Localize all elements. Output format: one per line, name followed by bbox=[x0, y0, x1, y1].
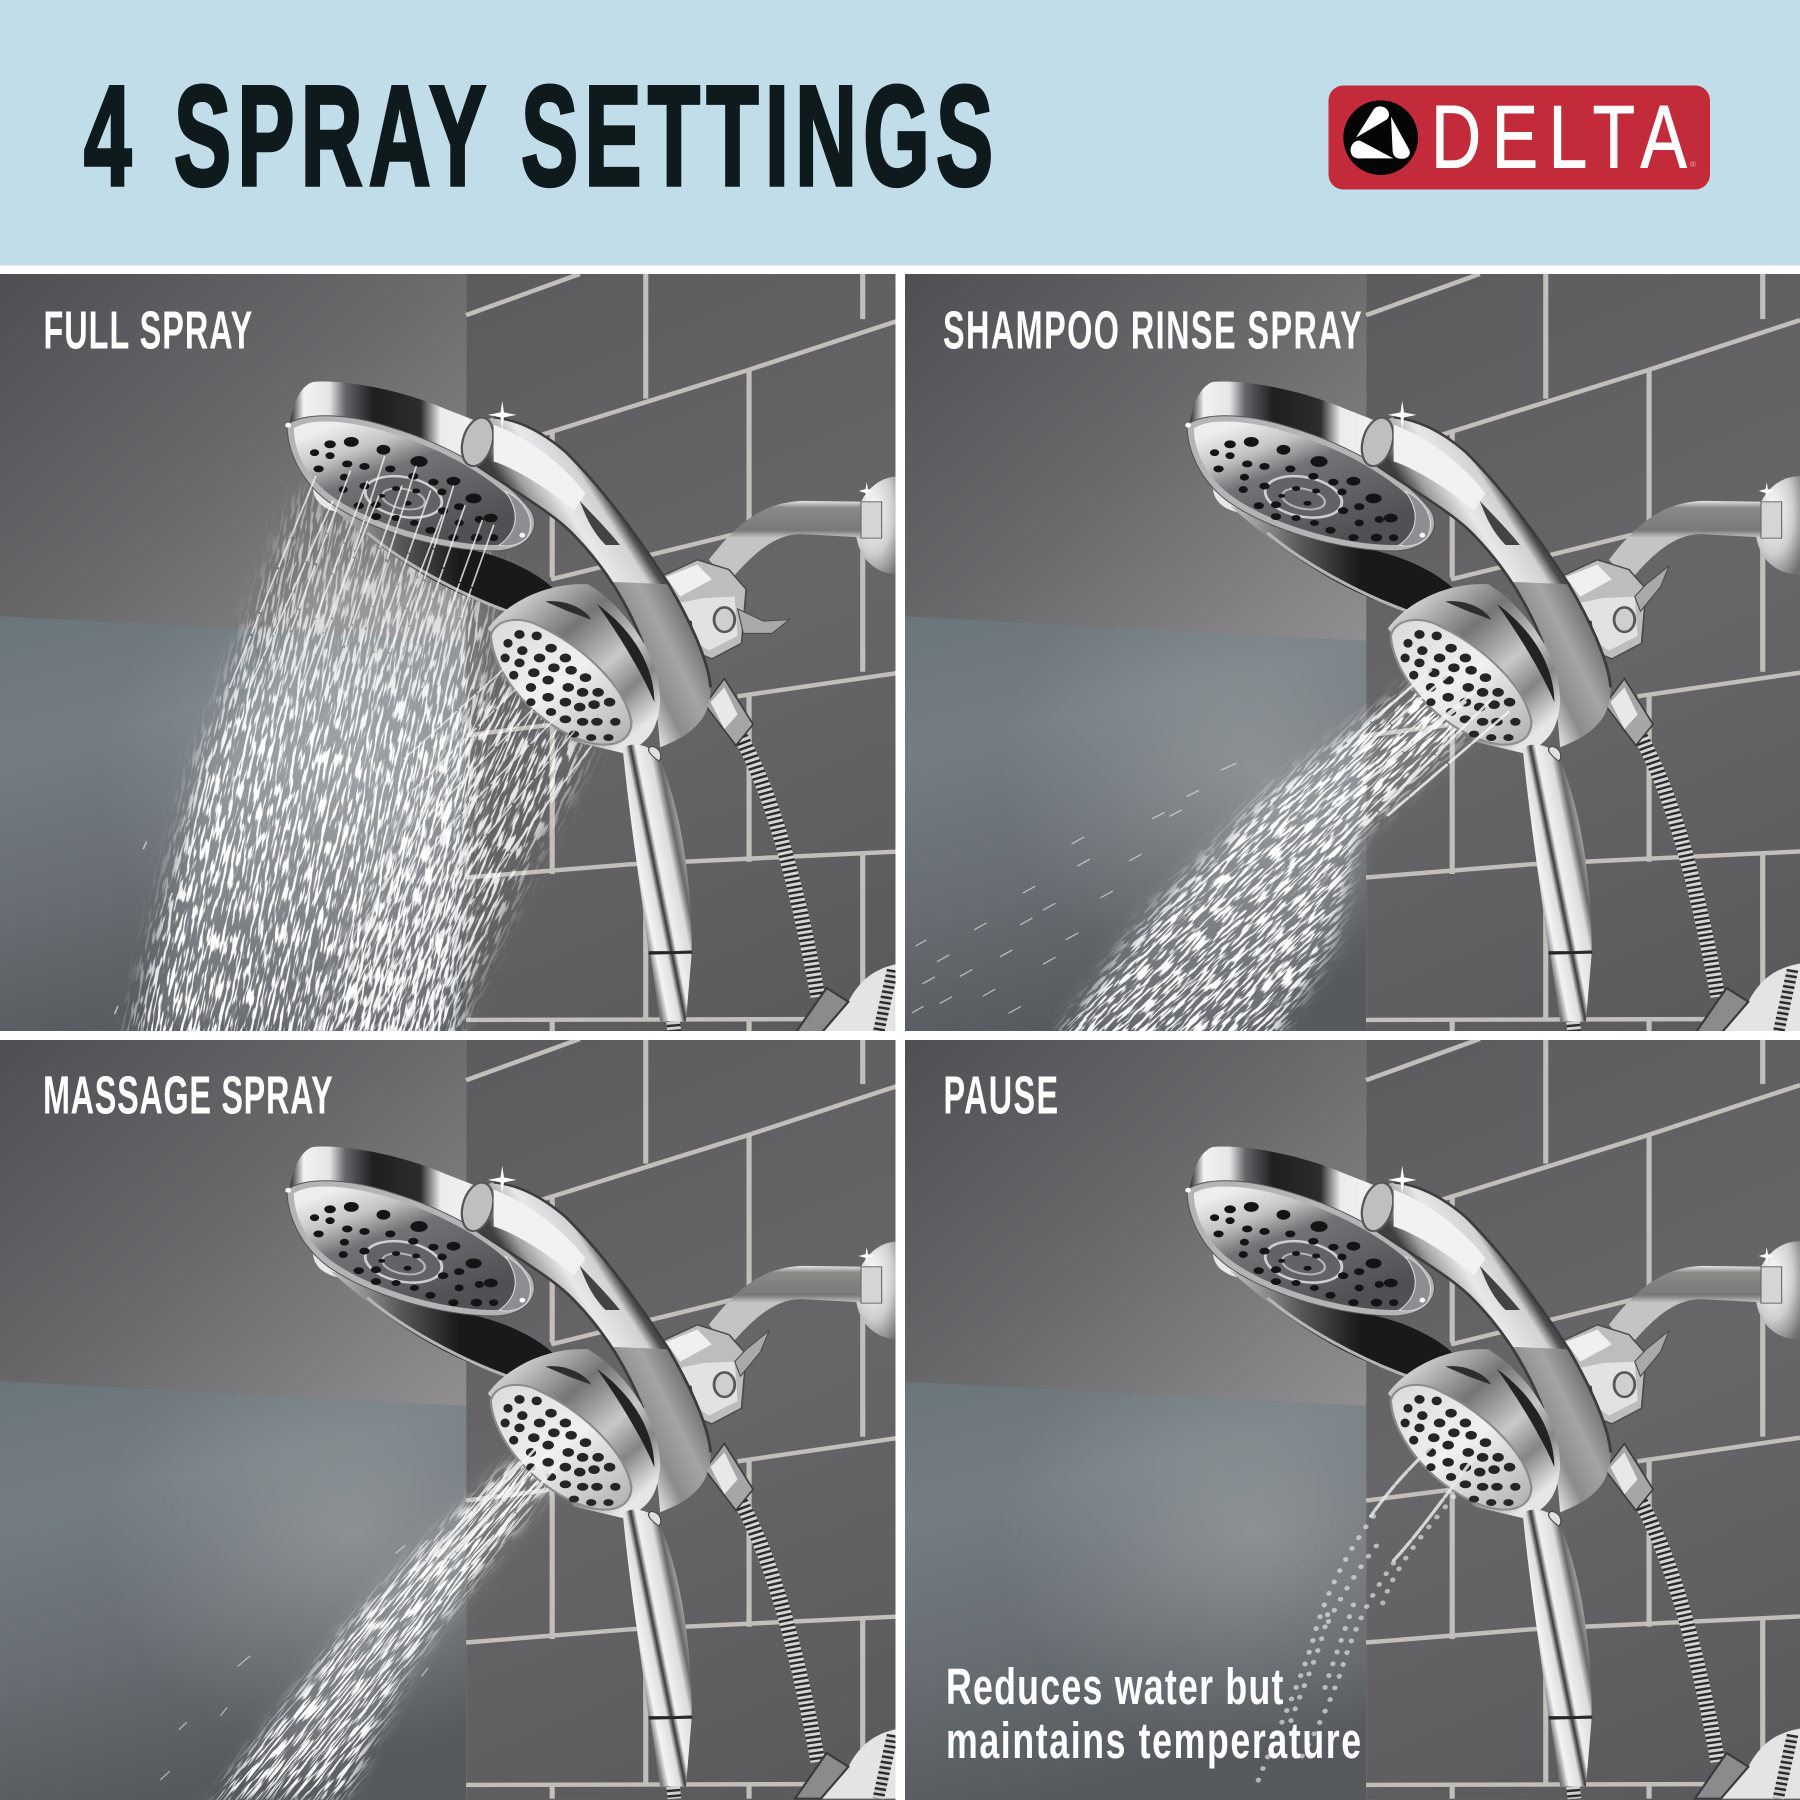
header band bbox=[0, 0, 1800, 266]
label: massage spray: MASSAGE SPRAY bbox=[43, 1066, 333, 1126]
shower hardware bbox=[285, 382, 900, 1034]
panel: massage spray bbox=[0, 1035, 900, 1800]
wall and tile backdrop bbox=[900, 270, 1800, 1035]
title: 4 SPRAY SETTINGS bbox=[84, 56, 993, 215]
shower hardware bbox=[1185, 1147, 1800, 1799]
icon: swivel wing bbox=[1635, 566, 1669, 611]
water speckle bbox=[206, 1454, 553, 1800]
spray glow bbox=[240, 1467, 565, 1770]
panel: full spray bbox=[0, 274, 896, 1031]
icon: swivel wing bbox=[1635, 1331, 1669, 1376]
logo badge bbox=[1328, 86, 1710, 190]
icon: swivel wing bbox=[735, 1331, 769, 1376]
hand shower water speckle bbox=[298, 658, 600, 1031]
caption: pause description bbox=[946, 1659, 1361, 1770]
label: shampoo rinse spray: SHAMPOO RINSE SPRAY bbox=[943, 301, 1362, 361]
main head water speckle bbox=[118, 484, 510, 1031]
wall and tile backdrop bbox=[900, 1035, 1800, 1800]
water streams bbox=[115, 457, 591, 1014]
water speckle bbox=[1054, 679, 1472, 1031]
wall and tile backdrop bbox=[0, 1035, 900, 1800]
shower hardware bbox=[1185, 382, 1800, 1034]
label: full spray: FULL SPRAY bbox=[44, 301, 252, 361]
water streams and droplets bbox=[913, 670, 1508, 1013]
logo: Delta bbox=[1328, 86, 1710, 190]
spray glow bbox=[1066, 690, 1490, 1031]
shower hardware bbox=[285, 1147, 900, 1799]
wall and tile backdrop bbox=[0, 270, 900, 1035]
caption line 2: maintains temperature bbox=[946, 1713, 1361, 1770]
label: pause: PAUSE bbox=[944, 1066, 1058, 1126]
water streams and droplets bbox=[161, 1448, 560, 1780]
panel: shampoo rinse spray bbox=[905, 274, 1800, 1031]
spray glow bbox=[150, 560, 490, 1030]
registered mark: ® bbox=[1690, 160, 1696, 169]
icon: swivel wing bbox=[738, 609, 789, 633]
caption line 1: Reduces water but bbox=[946, 1659, 1284, 1716]
panel: pause bbox=[900, 1035, 1800, 1800]
icon: Delta triangle mark bbox=[1343, 100, 1418, 175]
water trickle and droplets bbox=[1256, 1448, 1474, 1786]
logo wordmark: DELTA bbox=[1431, 87, 1688, 186]
